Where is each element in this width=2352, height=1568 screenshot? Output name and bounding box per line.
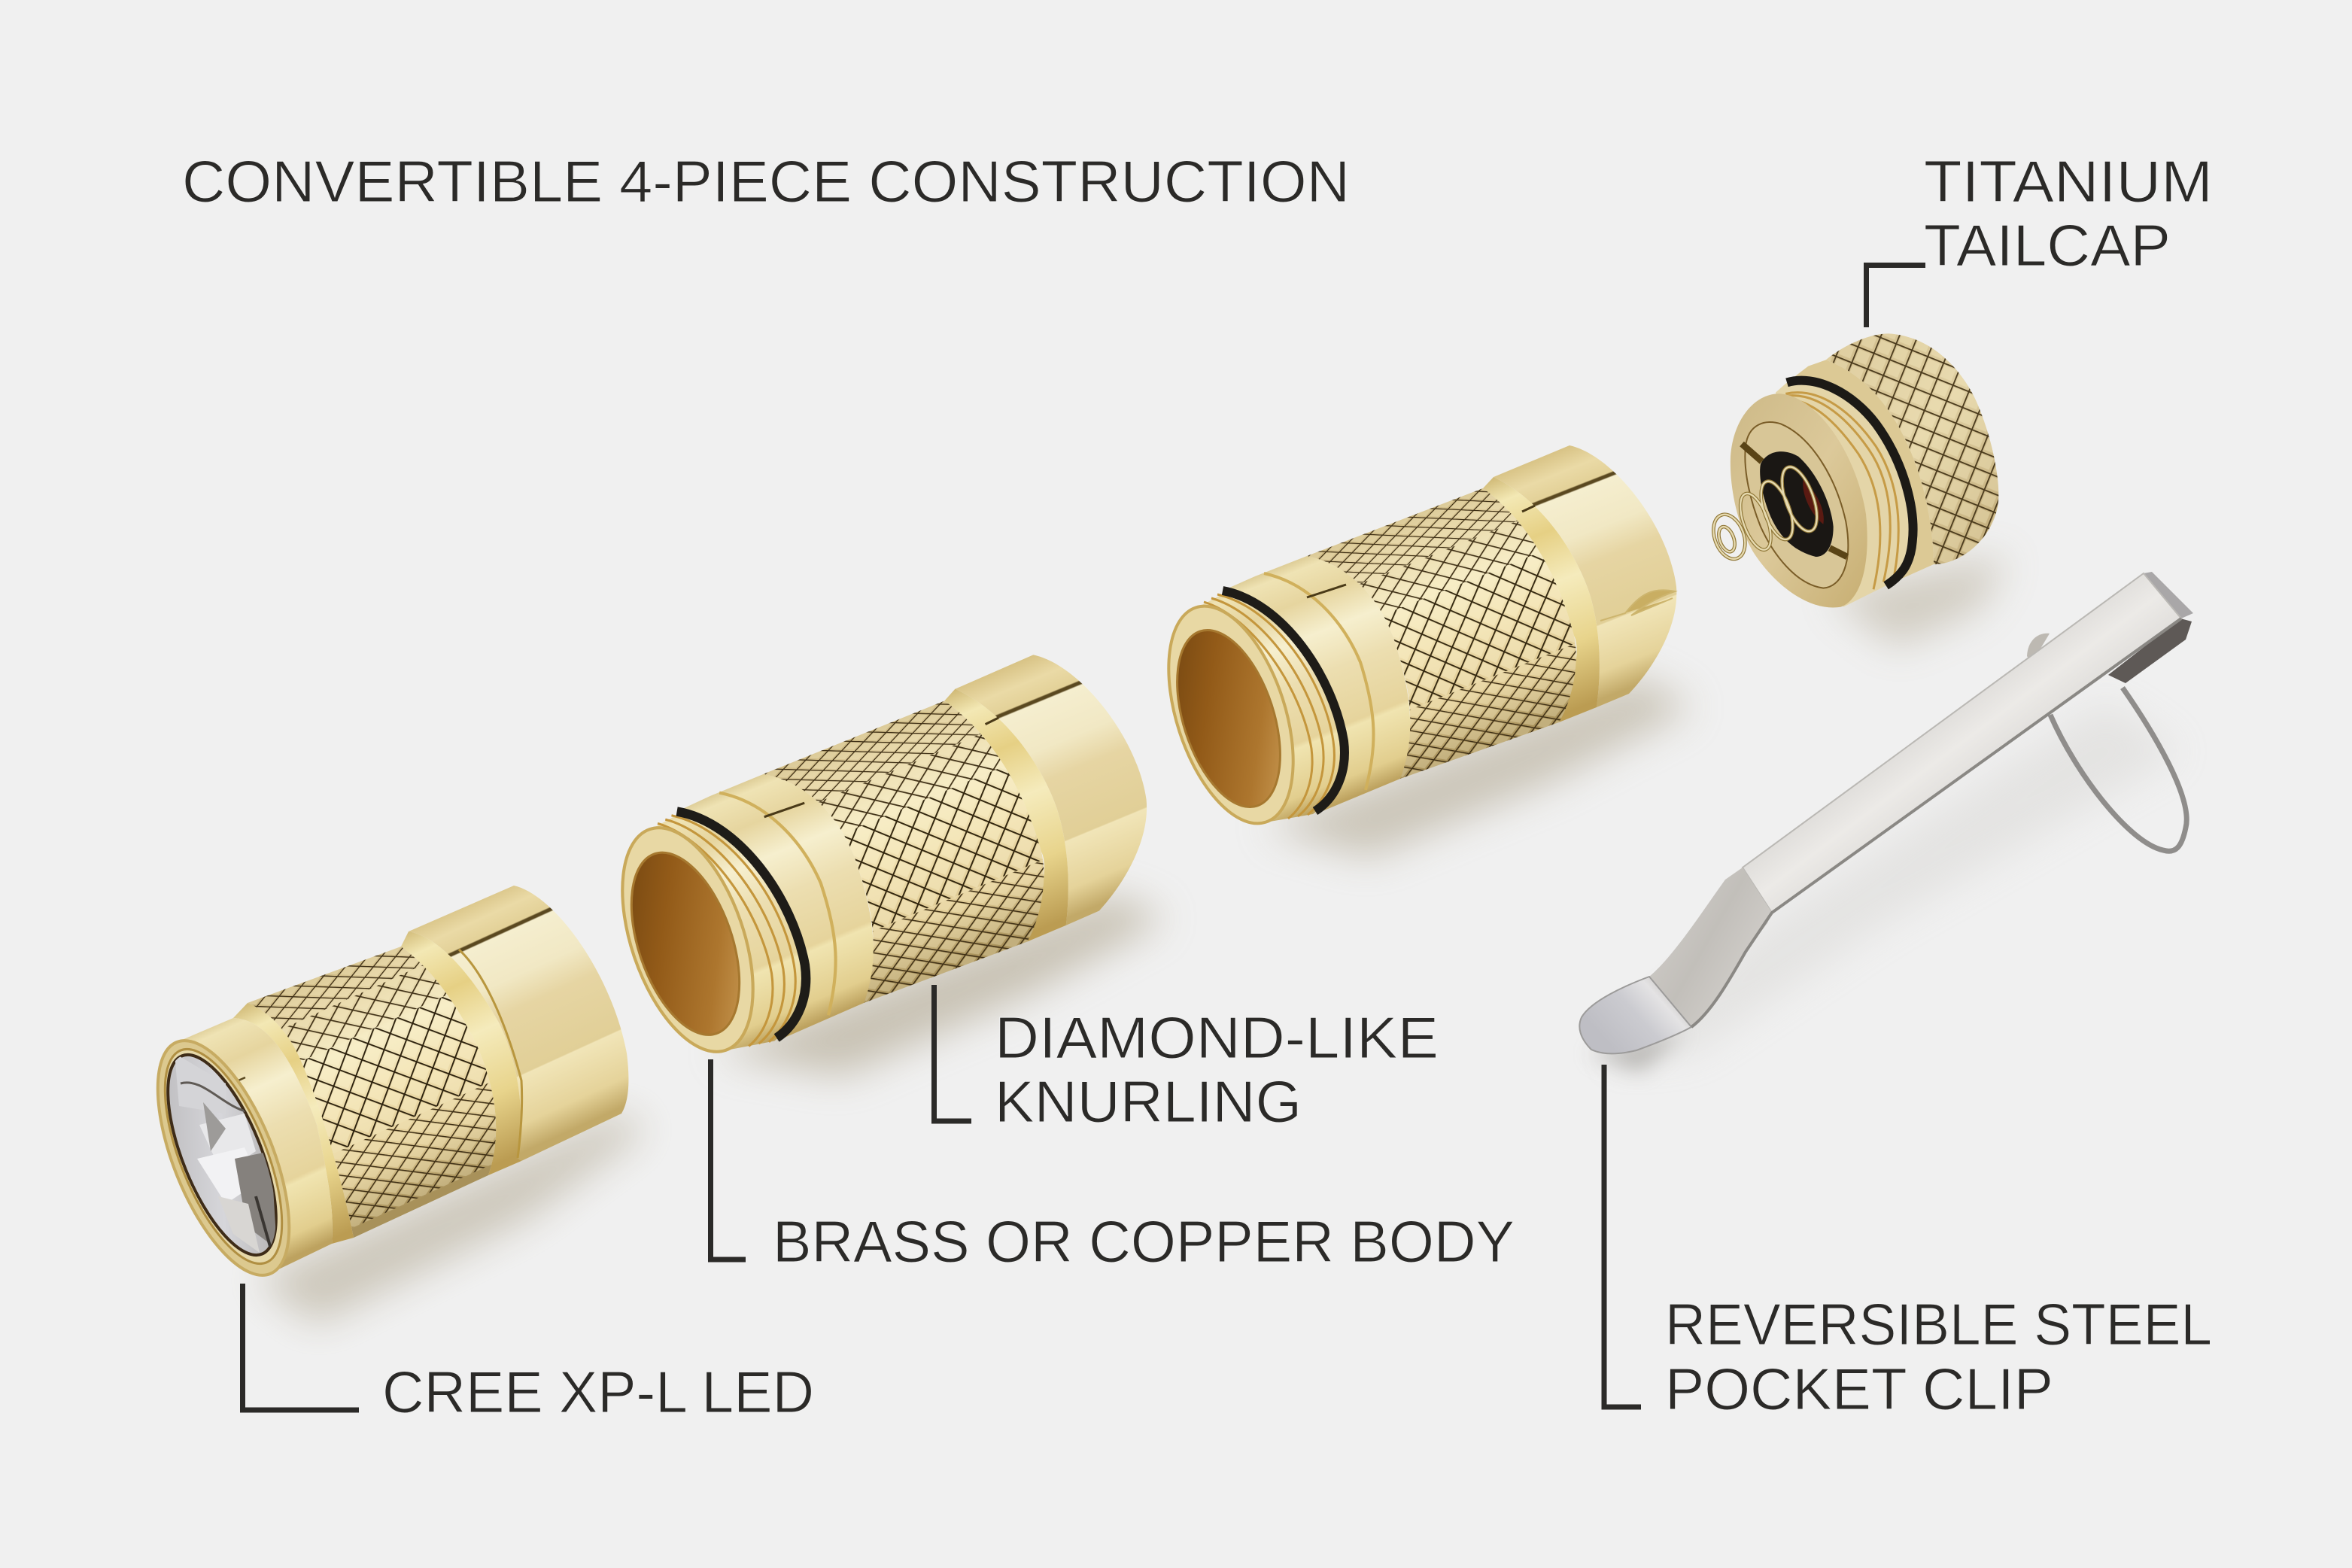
collar [1223, 556, 1410, 814]
clip fold [2144, 572, 2193, 618]
callout: cree xp-l led [242, 1284, 814, 1425]
label: BRASS OR COPPER BODY [773, 1208, 1515, 1275]
piece 1 knurling [248, 947, 497, 1238]
knurling [1263, 415, 1699, 801]
leader line [934, 985, 971, 1121]
spring [1708, 463, 1824, 564]
leader line [1866, 265, 1925, 327]
label line 2: TAILCAP [1924, 212, 2171, 278]
rear band [1494, 445, 1676, 707]
tailcap collar [1787, 360, 1934, 585]
flashlight piece 2: threaded center tube [593, 621, 1174, 1070]
piece 1 front band [177, 1018, 333, 1274]
leader line [242, 1284, 359, 1410]
clip slot [2108, 618, 2192, 683]
title: CONVERTIBLE 4-PIECE CONSTRUCTION [182, 148, 1350, 214]
tailcap end face [1731, 394, 1867, 608]
threads [1196, 592, 1344, 822]
rear ring [1483, 477, 1600, 722]
label line 2: KNURLING [995, 1068, 1302, 1135]
bore [1157, 617, 1300, 820]
flashlight piece 1: head with LED [156, 886, 629, 1277]
callout: diamond-like knurling [934, 985, 1439, 1135]
o-ring [1223, 591, 1345, 811]
label: CREE XP-L LED [382, 1359, 814, 1425]
LED reflector [166, 1053, 278, 1257]
leader line [1604, 1065, 1641, 1407]
tailcap black insert [1760, 451, 1834, 557]
piece 3 rear reflection [1600, 590, 1675, 621]
label line 1: DIAMOND-LIKE [995, 1004, 1439, 1071]
clip knob [2027, 634, 2050, 664]
clip bend [1649, 868, 1772, 1027]
label line 1: REVERSIBLE STEEL [1665, 1291, 2212, 1357]
flashlight piece 3: threaded battery tube [1144, 415, 1699, 839]
cast shadows [256, 557, 2182, 1324]
clip wire loop [2050, 688, 2186, 851]
tailcap o-ring [1787, 381, 1913, 585]
label line 1: TITANIUM [1924, 148, 2213, 214]
tailcap inner face [1745, 422, 1848, 588]
infographic canvas [156, 161, 2210, 1413]
callout: titanium tailcap [1866, 148, 2213, 327]
tailcap knurled dome [1826, 333, 1998, 564]
callout: brass or copper body [710, 1059, 1515, 1275]
piece 1 rear band [409, 886, 628, 1161]
piece 1 front bezel [131, 1023, 316, 1293]
tailcap contact [1803, 479, 1824, 524]
pocket clip [1579, 572, 2193, 1053]
leader line [710, 1059, 746, 1260]
clip main face [1743, 573, 2181, 913]
piece 1 front ring [233, 1003, 354, 1244]
piece 1 rear ring [401, 931, 521, 1175]
tailcap slots [1742, 444, 1847, 557]
clip tip [1579, 977, 1691, 1053]
tailcap threads [1773, 381, 1913, 607]
tailcap [1708, 333, 1998, 608]
callout: reversible steel pocket clip [1604, 1065, 2212, 1422]
front rim [1144, 591, 1317, 839]
label line 2: POCKET CLIP [1665, 1356, 2053, 1422]
